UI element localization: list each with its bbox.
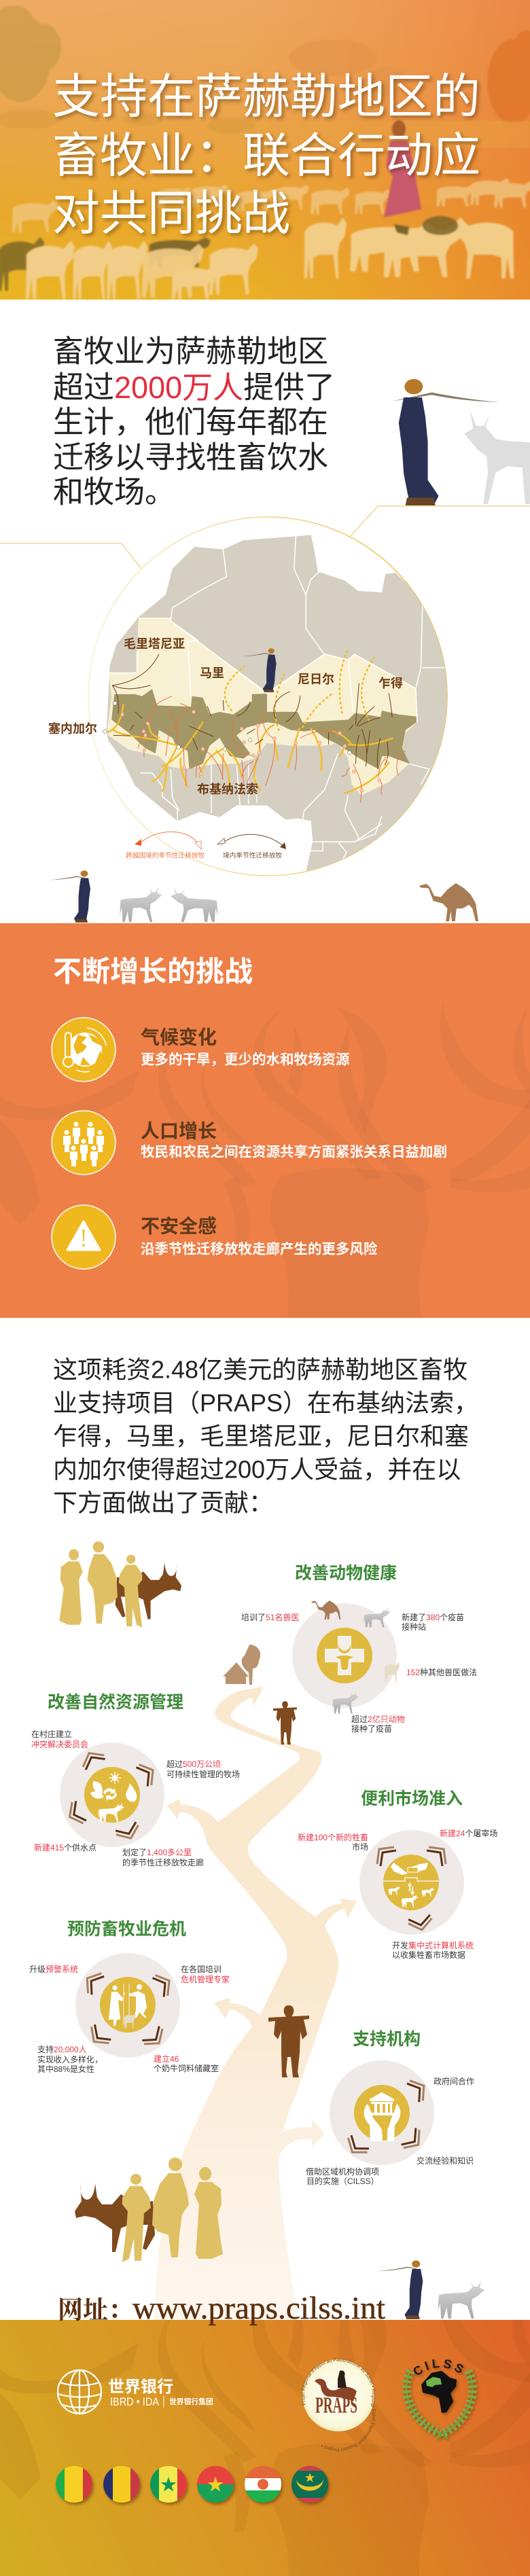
title: 支持在萨赫勒地区的 <box>52 70 480 123</box>
stat: income diversification: 实现收入多样化， <box>37 2054 103 2064</box>
cow facing left <box>171 888 218 922</box>
disc: market access <box>359 1830 464 1935</box>
heading: crisis prevention: 预防畜牧业危机 <box>67 1920 186 1939</box>
icon: market exchange <box>383 1855 439 1910</box>
logo: World Bank <box>58 2370 213 2414</box>
stat: water points: 新建415个供水点 <box>34 1842 96 1853</box>
map country labels: 马里 <box>200 666 224 680</box>
stat: corridors: 的季节性迁移放牧走廊 <box>122 1857 204 1867</box>
stat: veterinary practices: 152种其他兽医做法 <box>406 1667 477 1677</box>
camel <box>419 883 478 921</box>
map legend: cross-border transhumance: 跨越国境的季节性迁移放牧 <box>126 851 205 860</box>
herd: people and cow <box>75 2158 223 2262</box>
logo: CILSS <box>402 2359 480 2441</box>
chevrons <box>67 1751 156 1841</box>
map country labels: 毛里塔尼亚 <box>124 637 185 651</box>
small herdsman on path <box>273 1701 297 1745</box>
intro text block: 生计，他们每年都在 <box>53 405 328 439</box>
stat: vaccination stations <box>402 1612 464 1632</box>
map herder <box>242 648 279 692</box>
disc: animal health <box>292 1603 397 1708</box>
website link: 网址： <box>58 2296 133 2325</box>
hero photo: herder in pink <box>384 120 421 217</box>
stat: early warning: 升级预警系统 <box>29 1964 78 1974</box>
herder, strip above challenges <box>49 870 93 923</box>
section: crisis prevention <box>29 1920 230 2074</box>
map: land <box>107 535 473 880</box>
stat: corridors: 划定了1,400多公里 <box>122 1847 192 1857</box>
icon: couple with goat <box>100 1977 156 2033</box>
stat: committees: 冲突解决委员会 <box>31 1739 88 1749</box>
text: climate change: 气候变化 <box>141 1027 217 1048</box>
stat: livestock markets <box>298 1832 368 1852</box>
herder, bottom right <box>376 2260 426 2319</box>
stat: animals vaccinated: 接种了疫苗 <box>351 1723 392 1734</box>
icon: natural resources <box>84 1767 140 1823</box>
stat: corridors <box>122 1847 204 1867</box>
text: population growth: 人口增长 <box>141 1121 217 1141</box>
map: brown internal routes <box>112 654 392 769</box>
stat: income diversification: 其中88%是女性 <box>37 2064 94 2074</box>
stat: CILSS coordination: 借助区域机构协调项 <box>306 2166 379 2177</box>
flag: Burkina Faso <box>197 2466 234 2503</box>
stat: CILSS coordination <box>306 2166 379 2186</box>
stat: data system: 以收集牲畜市场数据 <box>392 1950 465 1960</box>
cow, bottom right <box>438 2280 484 2319</box>
map legend: cross-border transhumance <box>126 831 205 860</box>
large herdsman on path <box>268 2005 309 2077</box>
flags <box>56 2466 328 2503</box>
gray cow <box>464 411 530 504</box>
stat: rangeland: 可持续性管理的牧场 <box>166 1769 240 1779</box>
stat: animals vaccinated: 超过2亿只动物 <box>351 1714 405 1724</box>
logo: PRAPS: Projet Régional d'Appui au Pastoralisme au Sahel • Regional Sahel Pastoralism Support Project • <box>301 2358 376 2452</box>
stat: livestock markets: 市场 <box>352 1842 368 1852</box>
text: climate change: 更多的干旱，更少的水和牧场资源 <box>141 1052 350 1068</box>
flag: Mali <box>56 2466 92 2503</box>
text: insecurity <box>141 1216 378 1257</box>
hero banner <box>0 0 530 300</box>
stat: rangeland: 超过500万公顷 <box>166 1759 221 1769</box>
hero photo: trees <box>0 5 530 300</box>
heading: animal health: 改善动物健康 <box>295 1564 397 1583</box>
text: climate change <box>141 1027 350 1068</box>
flag: Mauritania <box>292 2466 328 2503</box>
cow facing right <box>120 887 162 922</box>
website link: www.praps.cilss.int <box>132 2291 385 2326</box>
section: natural resources <box>31 1693 240 1867</box>
icon: institution in hands <box>354 2085 410 2141</box>
stat: livestock markets: 新建100个新的牲畜 <box>298 1832 368 1842</box>
stat: knowledge exchange: 交流经验和知识 <box>417 2155 474 2166</box>
intro text block <box>53 334 335 509</box>
animal: cow <box>332 1691 359 1713</box>
animal: cow <box>364 1607 390 1628</box>
project paragraph: 业支持项目（PRAPS）在布基纳法索， <box>53 1389 478 1417</box>
stat: slaughterhouses: 新建24个屠宰场 <box>440 1828 497 1838</box>
arrow to institutions <box>268 2119 325 2155</box>
stat: feed stores <box>154 2054 219 2073</box>
disc: institutions <box>330 2060 434 2165</box>
map country labels: 乍得 <box>378 677 403 690</box>
icon: veterinary cross <box>317 1628 372 1683</box>
hut and tree <box>223 1645 260 1685</box>
icon: warning <box>52 1205 116 1269</box>
icon: population <box>52 1111 116 1175</box>
map: route hubs <box>121 710 388 792</box>
text: insecurity: 不安全感 <box>141 1216 217 1236</box>
title <box>52 70 480 240</box>
text: population growth: 牧民和农民之间在资源共享方面紧张关系日益加剧 <box>141 1144 447 1160</box>
stat: income diversification <box>37 2044 103 2074</box>
animal: goat <box>385 1662 400 1683</box>
stat: CILSS coordination: 目的实施（CILSS） <box>306 2176 379 2186</box>
project paragraph: 这项耗资2.48亿美元的萨赫勒地区畜牧 <box>53 1356 467 1383</box>
stat: intergovernmental cooperation: 政府间合作 <box>434 2076 474 2086</box>
icon: climate globe <box>52 1018 116 1081</box>
section: animal health <box>241 1564 477 1734</box>
section: market access <box>298 1789 497 1960</box>
title: 畜牧业：联合行动应 <box>52 129 480 182</box>
map country labels: 布基纳法索 <box>197 783 258 796</box>
stat: veterinarians: 培训了51名兽医 <box>241 1612 299 1622</box>
map: Sahel band <box>111 689 417 769</box>
stat: crisis experts: 危机管理专家 <box>181 1974 230 1984</box>
map legend: internal transhumance: 境内季节性迁移放牧 <box>223 851 282 860</box>
stat: crisis experts <box>181 1964 230 1984</box>
flag: Chad <box>103 2466 140 2503</box>
logo: World Bank: IBRD • IDA <box>110 2395 160 2408</box>
herd at top of path <box>59 1541 181 1628</box>
chevrons <box>348 2080 426 2155</box>
map: pastoral countries <box>107 618 417 795</box>
project paragraph: 内加尔使得超过200万人受益，并在以 <box>53 1455 461 1484</box>
intro text block: 超过2000万人提供了 <box>53 370 335 405</box>
disc: crisis prevention <box>75 1953 180 2058</box>
stat: crisis experts: 在各国培训 <box>181 1964 222 1974</box>
map: cross-border seasonal routes <box>108 704 392 793</box>
stat: feed stores: 个奶牛饲料储藏室 <box>154 2063 219 2073</box>
project paragraph: 下方面做出了贡献： <box>53 1489 273 1516</box>
flag: Senegal <box>150 2466 187 2503</box>
hero photo: distant flock <box>12 178 530 232</box>
stat: committees <box>31 1729 88 1749</box>
stat: animals vaccinated <box>351 1714 405 1734</box>
heading: institutions: 支持机构 <box>353 2030 421 2049</box>
flag: Niger <box>245 2466 281 2503</box>
stat: rangeland <box>166 1759 240 1779</box>
heading: market access: 便利市场准入 <box>361 1789 463 1808</box>
text: population growth <box>141 1121 447 1160</box>
chevrons <box>377 1847 446 1933</box>
chevrons <box>85 1973 172 2045</box>
panel: growing challenges <box>0 923 530 1319</box>
heading: growing challenges: 不断增长的挑战 <box>53 955 253 988</box>
herder with stick <box>392 379 500 505</box>
map country labels: 尼日尔 <box>298 673 334 686</box>
logo: CILSS: CILSS <box>413 2359 466 2378</box>
winding path with branch arrows <box>155 1686 357 2323</box>
logo: World Bank: 世界银行集团 <box>169 2397 213 2406</box>
disc: natural resources <box>60 1742 164 1847</box>
map of the Sahel <box>88 517 473 880</box>
project paragraph: 乍得，马里，毛里塔尼亚，尼日尔和塞 <box>53 1423 469 1450</box>
intro text block: 畜牧业为萨赫勒地区 <box>53 334 328 368</box>
section: supporting institutions <box>306 2030 474 2186</box>
intro text block: 迁移以寻找牲畜饮水 <box>53 440 328 474</box>
stat: data system <box>392 1940 474 1960</box>
project paragraph <box>53 1356 478 1516</box>
heading: natural resources: 改善自然资源管理 <box>48 1693 183 1712</box>
stat: committees: 在村庄建立 <box>31 1729 72 1739</box>
map country labels <box>48 637 403 796</box>
logo: World Bank: 世界银行 <box>108 2378 173 2397</box>
title: 对共同挑战 <box>52 187 290 240</box>
map country labels: 塞内加尔 <box>48 721 97 736</box>
map: borders <box>109 537 450 868</box>
intro text block: 和牧场。 <box>53 474 175 509</box>
stat: feed stores: 建立46 <box>154 2054 179 2064</box>
text: insecurity: 沿季节性迁移放牧走廊产生的更多风险 <box>141 1240 378 1257</box>
stat: data system: 开发集中式计算机系统 <box>392 1940 474 1950</box>
animal: camel <box>311 1600 340 1620</box>
footer panel <box>0 2320 530 2576</box>
map: orange routes <box>138 696 406 803</box>
stat: income diversification: 支持20,000人 <box>37 2044 87 2054</box>
logo: PRAPS: PRAPS <box>315 2393 357 2418</box>
map legend: internal transhumance <box>217 834 286 860</box>
stat: vaccination stations: 新建了380个疫苗 <box>402 1612 464 1622</box>
stat: vaccination stations: 接种站 <box>402 1622 426 1632</box>
hero photo: front flock <box>0 216 514 300</box>
decorative map callout lines <box>0 506 530 575</box>
